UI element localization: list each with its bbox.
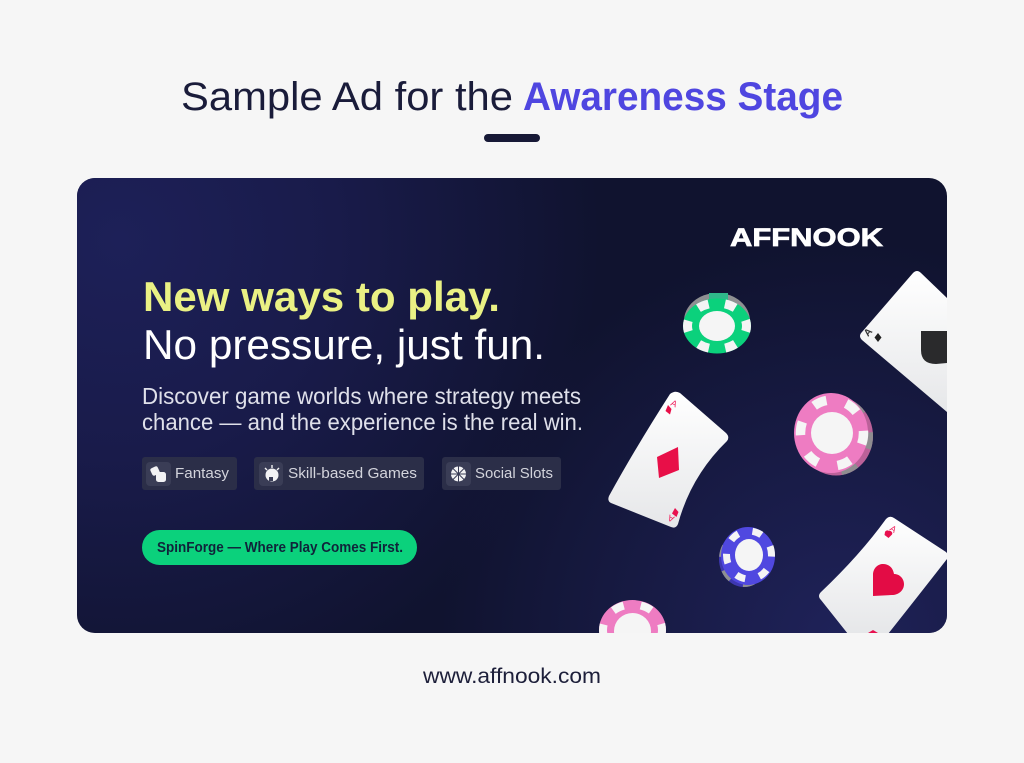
tag: Social Slots: Social Slots bbox=[475, 465, 553, 482]
card: ace of hearts bbox=[819, 517, 948, 634]
card: ace of diamonds bbox=[608, 392, 728, 528]
card: ace of spades bbox=[860, 271, 947, 412]
tag: Fantasy: Fantasy bbox=[175, 465, 230, 482]
tag: Social Slots bbox=[442, 457, 561, 490]
call to action button bbox=[142, 530, 417, 565]
chip: large pink bbox=[794, 393, 873, 476]
call to action button: SpinForge — Where Play Comes First. bbox=[157, 540, 403, 556]
headline bbox=[143, 273, 545, 368]
chip: bottom pink bbox=[599, 600, 666, 633]
panel: ad banner bbox=[77, 178, 948, 660]
card: ace of diamonds: A bbox=[666, 513, 676, 524]
illustration: cards and chips bbox=[599, 271, 948, 660]
icon: slot reel bbox=[450, 466, 466, 482]
body text: chance — and the experience is the real win. bbox=[142, 409, 583, 435]
chip: green bbox=[683, 293, 751, 354]
chip: blue bbox=[719, 527, 775, 587]
body text bbox=[142, 383, 583, 435]
icon: brain idea bbox=[265, 465, 279, 482]
footer url: www.affnook.com bbox=[422, 665, 601, 688]
infographic canvas bbox=[77, 81, 947, 683]
card: ace of spades: A bbox=[862, 326, 875, 339]
tag: Skill-based Games bbox=[254, 457, 424, 490]
title underline accent bbox=[484, 134, 540, 142]
icon: dice bbox=[150, 466, 166, 482]
tag: Skill-based Games: Skill-based Games bbox=[288, 465, 417, 482]
title bbox=[181, 75, 843, 119]
headline: No pressure, just fun. bbox=[143, 321, 545, 368]
tag: Fantasy bbox=[142, 457, 237, 490]
headline: New ways to play. bbox=[143, 273, 500, 320]
card: ace of diamonds: A bbox=[669, 398, 679, 409]
card: ace of hearts: A bbox=[888, 523, 898, 535]
body text: Discover game worlds where strategy meets bbox=[142, 383, 581, 409]
logo: AFFNOOK: AFFNOOK bbox=[730, 224, 883, 252]
title: Sample Ad for the bbox=[181, 75, 513, 119]
title: Awareness Stage bbox=[523, 75, 843, 119]
